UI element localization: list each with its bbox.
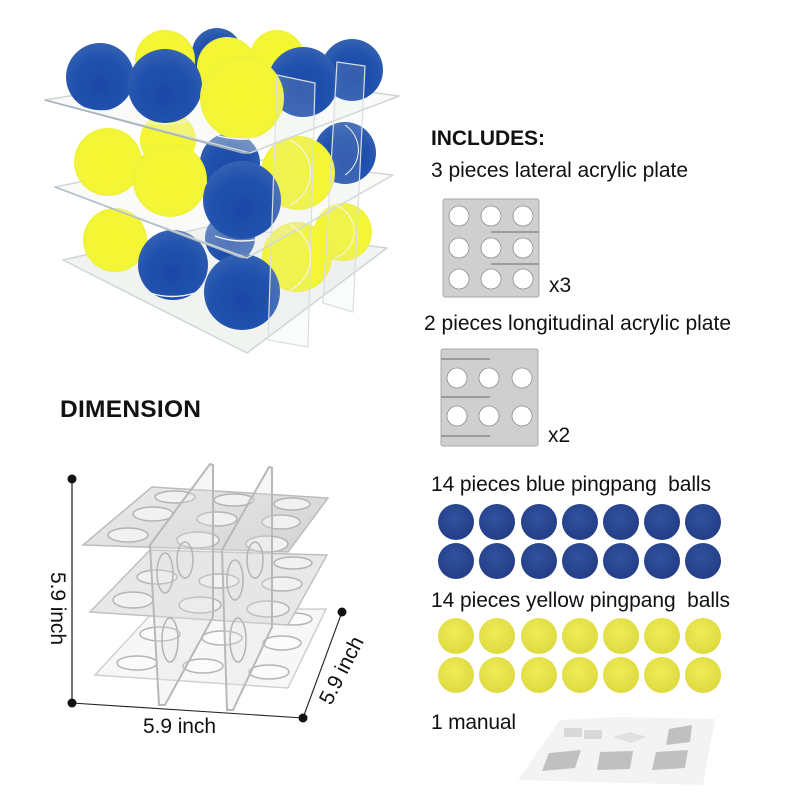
icon: lateral plate diagram (443, 199, 539, 297)
icon: longitudinal plate diagram (441, 349, 538, 446)
middle layer balls (74, 112, 376, 239)
text: blue balls: 14 pieces blue pingpang balls (431, 473, 711, 496)
dimension lines (68, 474, 346, 722)
icon: manual sheet (518, 717, 715, 785)
blue ball grid (438, 504, 721, 579)
label: width: 5.9 inch (143, 715, 216, 738)
vertical acrylic plates (268, 62, 365, 347)
top acrylic plate (45, 72, 399, 153)
heading: dimension: DIMENSION (60, 396, 201, 423)
rack top plate (83, 487, 328, 552)
bottom acrylic plate (63, 225, 387, 353)
yellow ball grid (438, 618, 721, 693)
rack vertical plates (150, 464, 272, 710)
rack bottom plate (95, 609, 326, 688)
heading: includes: INCLUDES: (431, 127, 545, 150)
label: x3: x3 (549, 274, 571, 297)
text: yellow balls: 14 pieces yellow pingpang balls (431, 589, 730, 612)
label: depth: 5.9 inch (315, 633, 369, 708)
bottom layer balls (83, 203, 372, 330)
text: longitudinal plates: 2 pieces longitudinal acrylic plate (424, 312, 731, 335)
text: lateral plates: 3 pieces lateral acrylic plate (431, 159, 688, 182)
label: height: 5.9 inch (46, 572, 69, 645)
product photo: acrylic rack with balls (45, 28, 399, 353)
text: manual: 1 manual (431, 711, 516, 734)
middle acrylic plate (55, 155, 393, 258)
ball seat rings (85, 108, 272, 331)
label: x2: x2 (548, 424, 570, 447)
rack middle plate (90, 550, 327, 625)
dimension drawing: empty acrylic rack (83, 464, 328, 710)
top layer balls (66, 28, 383, 140)
